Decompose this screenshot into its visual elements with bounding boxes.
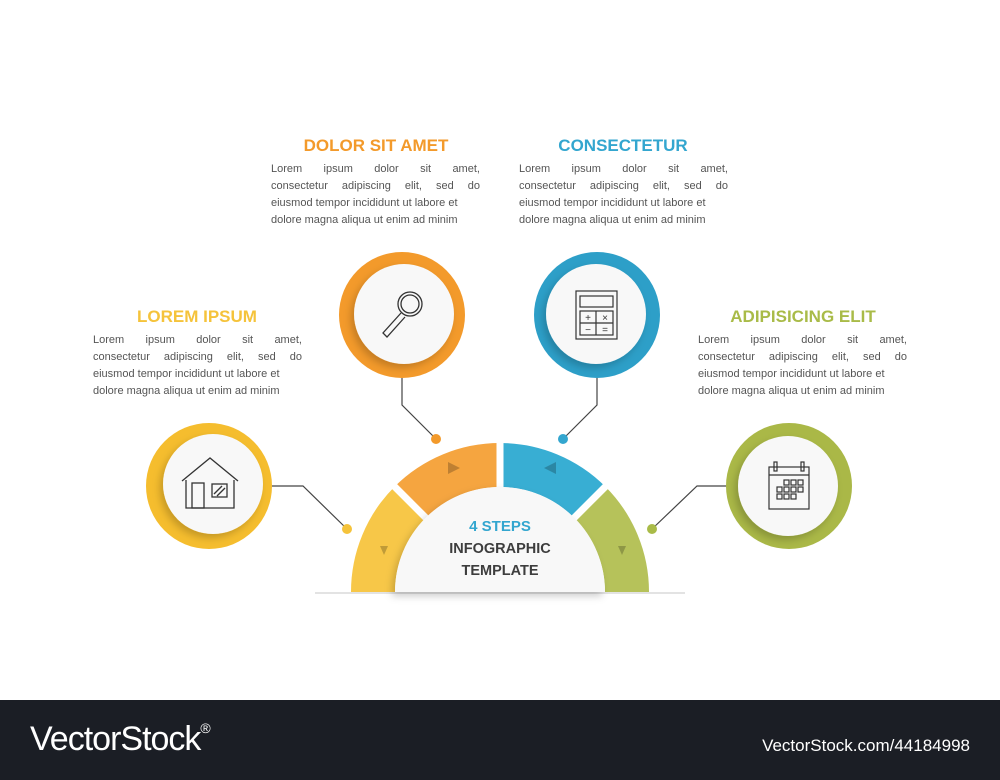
text block: adipisicing elit: dolore magna aliqua ut enim ad minim: [698, 385, 884, 397]
semicircle segments: [351, 440, 649, 592]
text block: dolor sit amet: dolore magna aliqua ut enim ad minim: [271, 214, 458, 226]
text block: lorem ipsum: sed: [258, 351, 276, 363]
circle: yellow house: [146, 423, 272, 549]
text block: lorem ipsum: [93, 334, 302, 397]
heading: dolor sit amet: DOLOR SIT AMET: [304, 136, 448, 155]
text block: dolor sit amet: dolor: [374, 163, 399, 175]
text block: consectetur: [519, 163, 728, 226]
text block: lorem ipsum: adipiscing: [164, 351, 213, 363]
text block: adipisicing elit: sed: [863, 351, 881, 363]
heading: lorem ipsum: LOREM IPSUM: [137, 307, 257, 326]
heading: adipisicing elit: ADIPISICING ELIT: [730, 307, 876, 326]
footer url: VectorStock.com/44184998: [762, 736, 970, 755]
text block: lorem ipsum: eiusmod tempor incididunt ut labore et: [93, 368, 280, 380]
circle: blue calculator: −: [585, 325, 591, 336]
text block: consectetur: consectetur: [519, 180, 576, 192]
text block: lorem ipsum: elit,: [227, 351, 244, 363]
text block: dolor sit amet: elit,: [405, 180, 422, 192]
center disc: [395, 487, 605, 592]
text block: adipisicing elit: do: [895, 351, 907, 363]
text block: adipisicing elit: Lorem: [698, 334, 729, 346]
connectors: [272, 378, 727, 529]
text block: dolor sit amet: amet,: [452, 163, 480, 175]
center disc: 4 STEPS: [469, 518, 531, 535]
text block: lorem ipsum: dolor: [196, 334, 221, 346]
text block: consectetur: elit,: [653, 180, 670, 192]
text block: consectetur: Lorem: [519, 163, 550, 175]
center disc: INFOGRAPHIC: [449, 541, 551, 557]
heading: consectetur: CONSECTETUR: [558, 136, 688, 155]
text block: dolor sit amet: [271, 163, 480, 226]
text block: dolor sit amet: sit: [420, 163, 431, 175]
text block: adipisicing elit: ipsum: [751, 334, 780, 346]
circle: blue calculator: ×: [602, 313, 608, 324]
connector dots: [342, 434, 657, 534]
text block: consectetur: adipiscing: [590, 180, 639, 192]
text block: consectetur: sit: [668, 163, 679, 175]
text block: dolor sit amet: adipiscing: [342, 180, 391, 192]
circle: blue calculator: [534, 252, 660, 378]
text block: adipisicing elit: consectetur: [698, 351, 755, 363]
circle: blue calculator: =: [602, 325, 608, 336]
text block: dolor sit amet: sed: [436, 180, 454, 192]
text block: lorem ipsum: sit: [242, 334, 253, 346]
text block: adipisicing elit: sit: [847, 334, 858, 346]
text block: adipisicing elit: adipiscing: [769, 351, 818, 363]
text block: lorem ipsum: ipsum: [146, 334, 175, 346]
text block: consectetur: dolore magna aliqua ut enim ad minim: [519, 214, 706, 226]
text block: adipisicing elit: dolor: [801, 334, 826, 346]
text block: consectetur: do: [716, 180, 728, 192]
circle: orange search: [339, 252, 465, 378]
text block: dolor sit amet: consectetur: [271, 180, 328, 192]
text block: consectetur: dolor: [622, 163, 647, 175]
text block: adipisicing elit: elit,: [832, 351, 849, 363]
text block: adipisicing elit: [698, 334, 907, 397]
circle: green calendar: [726, 423, 852, 549]
text block: dolor sit amet: ipsum: [324, 163, 353, 175]
center disc: TEMPLATE: [461, 563, 539, 579]
text block: lorem ipsum: dolore magna aliqua ut enim ad minim: [93, 385, 280, 397]
text block: dolor sit amet: eiusmod tempor incididunt ut labore et: [271, 197, 458, 209]
text block: lorem ipsum: do: [290, 351, 302, 363]
baseline: [315, 592, 685, 594]
footer bar: [0, 700, 1000, 780]
text block: adipisicing elit: eiusmod tempor incididunt ut labore et: [698, 368, 884, 380]
text block: consectetur: sed: [684, 180, 702, 192]
text block: consectetur: ipsum: [572, 163, 601, 175]
circle: blue calculator: +: [585, 313, 591, 324]
text block: lorem ipsum: amet,: [274, 334, 302, 346]
text block: dolor sit amet: Lorem: [271, 163, 302, 175]
text block: adipisicing elit: amet,: [879, 334, 907, 346]
text block: lorem ipsum: Lorem: [93, 334, 124, 346]
text block: consectetur: amet,: [700, 163, 728, 175]
text block: dolor sit amet: do: [468, 180, 480, 192]
text block: lorem ipsum: consectetur: [93, 351, 150, 363]
footer logo: VectorStock®: [30, 720, 210, 758]
text block: consectetur: eiusmod tempor incididunt ut labore et: [519, 197, 706, 209]
